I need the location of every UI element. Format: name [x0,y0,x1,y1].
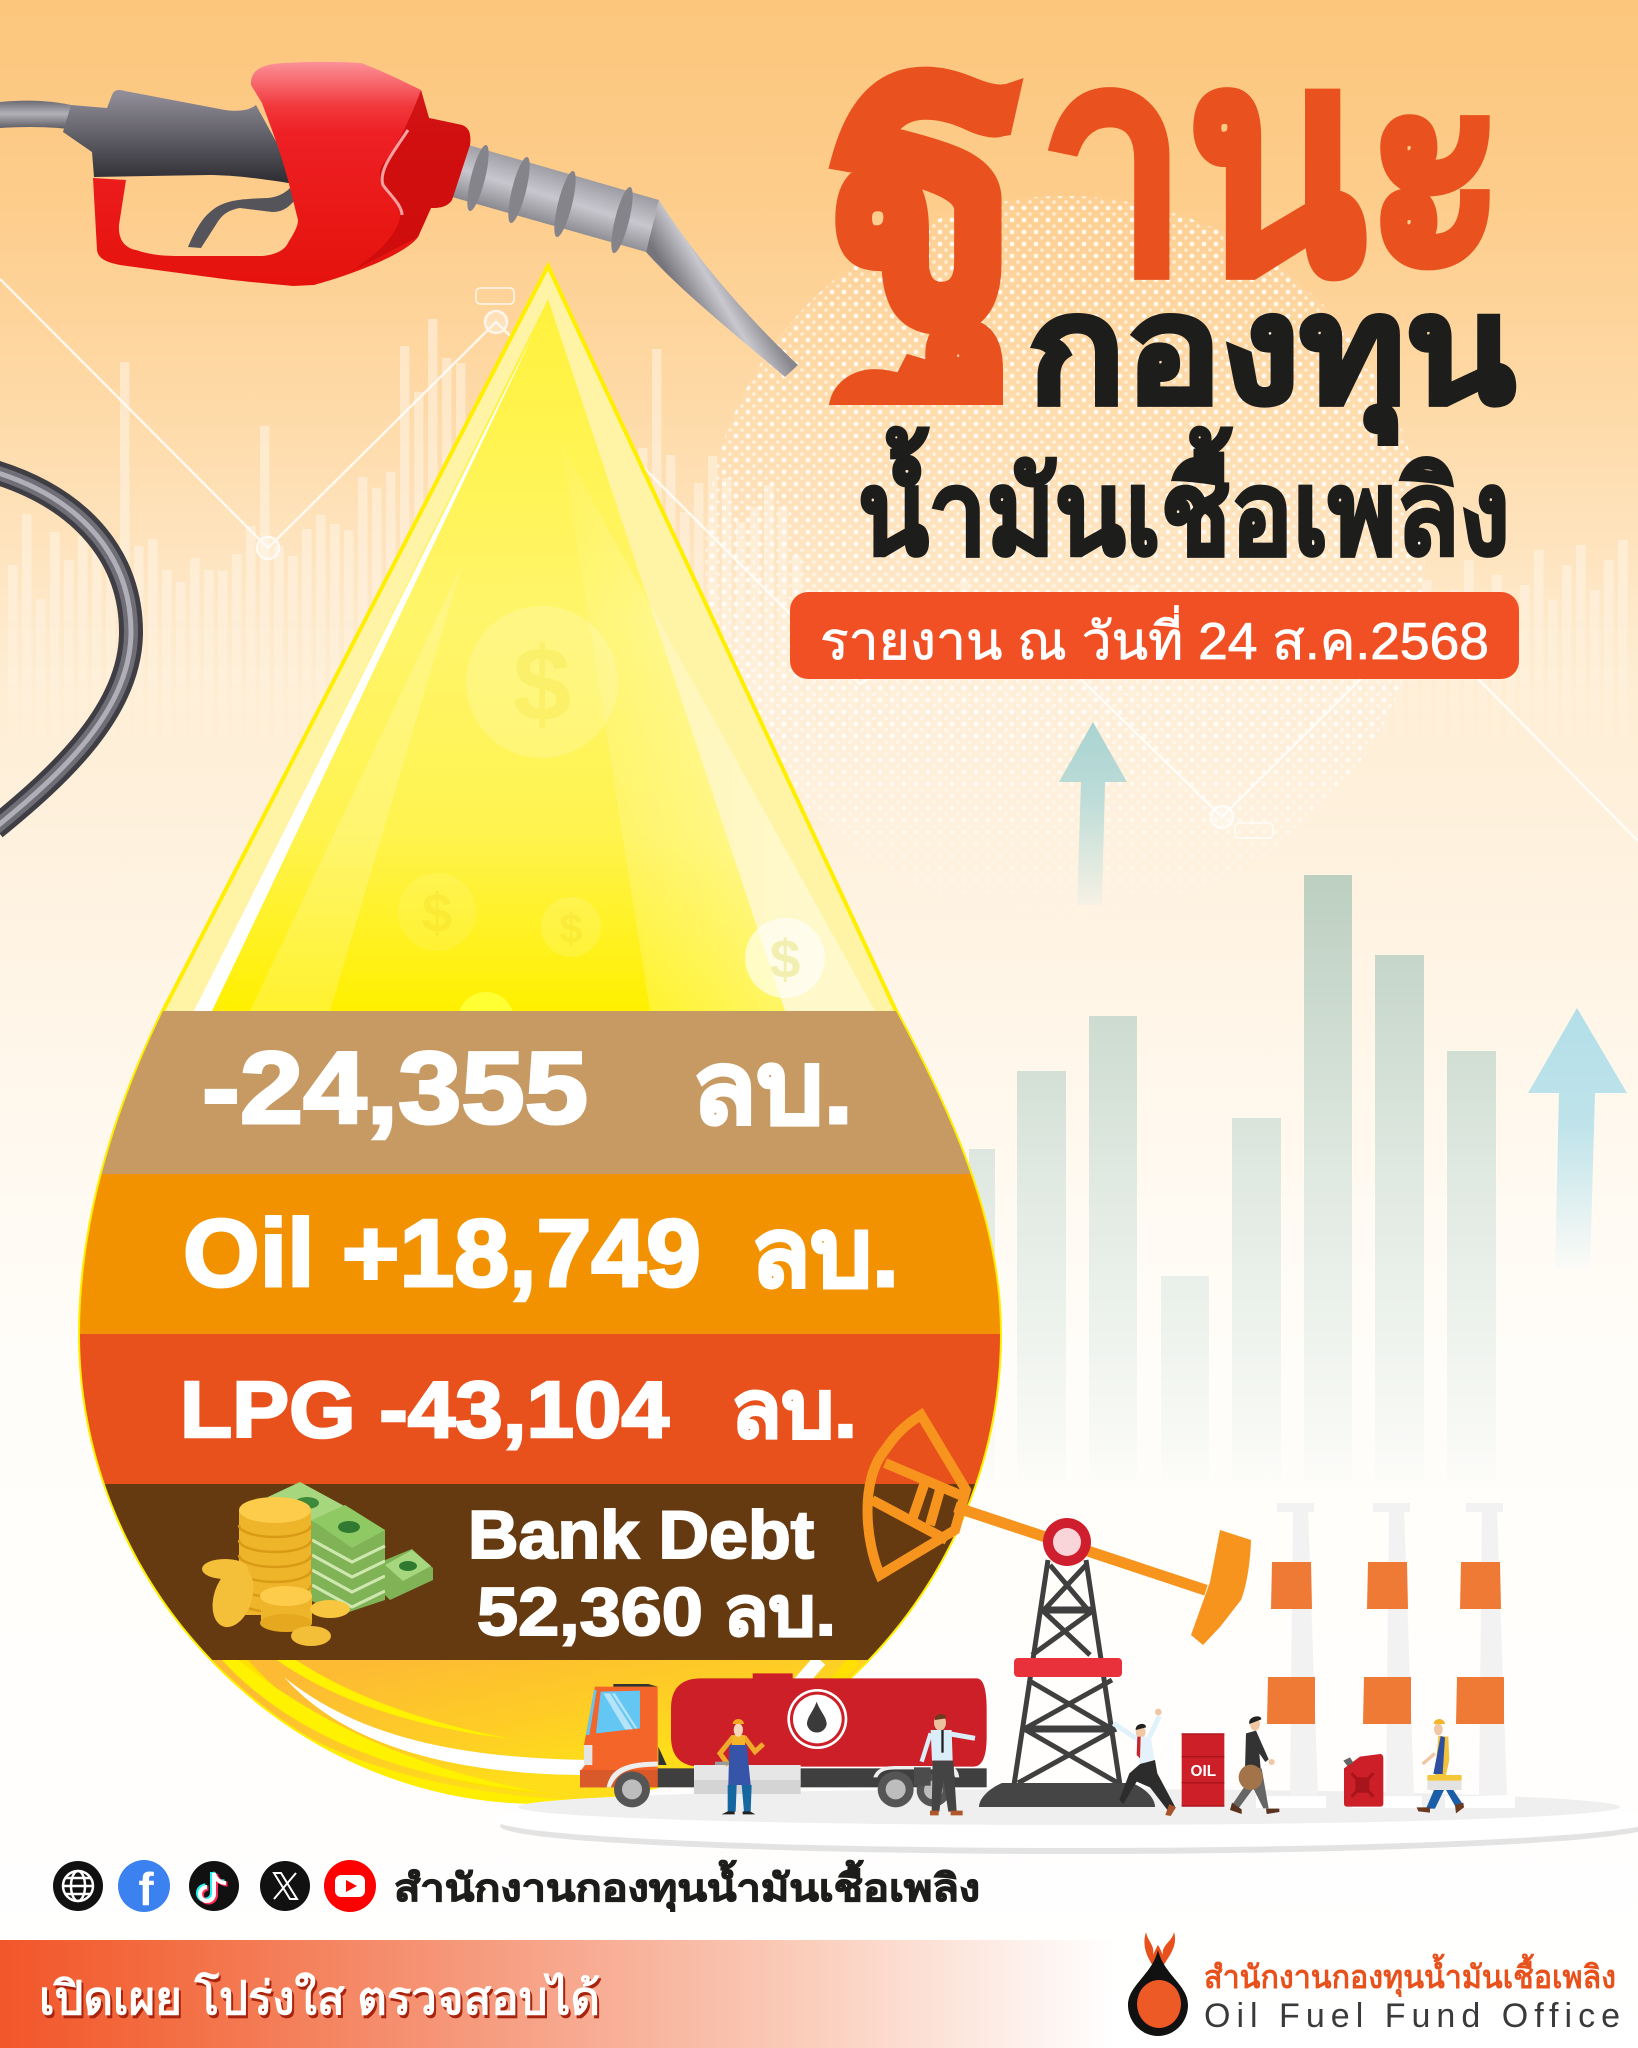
chimneys [1256,1503,1515,1808]
icon: web globe [53,1861,103,1911]
band: total balance [202,1031,853,1145]
social icons row [53,1860,376,1915]
icon: money and coins [202,1482,433,1646]
band: oil account: ลบ. [751,1200,899,1307]
logo flame [1144,1932,1175,1966]
arrow: small teal up [1059,722,1127,905]
icon: facebook: f [138,1863,154,1915]
band: LPG account: ลบ. [731,1365,857,1454]
fuel nozzle [0,62,798,377]
person: walking man with bag [1230,1716,1279,1814]
drop inner body: $ [770,928,800,990]
band: total balance: ลบ. [692,1031,853,1145]
chassis [657,1768,987,1787]
tank [671,1673,987,1767]
drop inner body: $ [559,905,583,952]
background thin bar chart [8,319,1628,760]
spout [445,142,659,252]
oil barrel: OIL [1191,1763,1216,1780]
icon: X [260,1861,310,1911]
dotted globe [705,196,1425,916]
icon: tiktok [189,1861,239,1911]
icon: youtube [324,1860,376,1912]
tank side box [694,1765,801,1794]
arrow: large blue up [1528,1008,1627,1269]
tank logo [787,1689,847,1749]
base [979,1783,1155,1807]
red body [93,62,470,286]
grey handle [63,90,300,185]
drop inner body [194,299,875,1800]
title: น้ำมันเชื้อเพลิง: น้ำมันเชื้อเพลิง [858,427,1510,580]
beam [951,1507,1210,1590]
person: worker with toolbox [1417,1719,1464,1813]
person: worker in overalls [715,1719,763,1814]
date pill [790,592,1519,679]
title: ฐานะ [826,0,1506,458]
hose: loop on left [0,472,131,828]
pump jack [868,1415,1251,1807]
logo drop [1128,1950,1188,2036]
horsehead [868,1415,966,1575]
hose into handle [0,101,76,130]
title: ฐานะ: านะ [1040,0,1506,338]
band: bank debt [468,1497,836,1650]
workers and props on the ground [1113,1709,1464,1816]
person: running man [1113,1709,1176,1816]
band backgrounds [60,1011,1020,1660]
title: กองทุน: กองทุน [1028,266,1515,444]
icon: facebook [118,1860,170,1915]
oil drop [60,266,1020,1820]
band: bank debt: 52,360 ลบ. [477,1574,836,1650]
tanker truck with worker and manager [580,1673,987,1815]
drop inner body: $ [513,626,571,743]
teal bars chart [969,875,1496,1480]
tower [1014,1560,1120,1785]
rear fender [873,1766,959,1777]
counterweight [1191,1530,1251,1645]
ground platform [495,1789,1638,1854]
footer slogan: เปิดเผย โปร่งใส ตรวจสอบได้ [39,1971,600,2024]
platform [1014,1658,1122,1677]
logo English name: Oil Fuel Fund Office [1204,1997,1620,2035]
footer band [0,1940,1115,2048]
band: LPG account [180,1365,857,1454]
band: total balance: -24,355 [202,1031,588,1145]
line graph [0,279,1638,841]
oil barrel [1182,1733,1224,1807]
person: manager [914,1714,975,1815]
band: LPG account: LPG -43,104 [180,1365,670,1454]
drop outer shape [80,266,1000,1802]
cab [580,1684,658,1787]
office name: สำนักงานกองทุนน้ำมันเชื้อเพลิง [394,1860,980,1912]
jerry can [1343,1754,1383,1807]
pivot [1043,1518,1091,1566]
trigger [188,188,295,248]
date pill: รายงาน ณ วันที่ 24 ส.ค.2568 [820,605,1489,671]
drop inner body: $ [422,882,452,944]
wheels [614,1771,950,1807]
logo Thai name: สำนักงานกองทุนน้ำมันเชื้อเพลิง [1204,1953,1616,1998]
band: oil account: Oil +18,749 [183,1200,701,1307]
band: bank debt: Bank Debt [468,1497,814,1573]
office logo [1128,1932,1620,2036]
